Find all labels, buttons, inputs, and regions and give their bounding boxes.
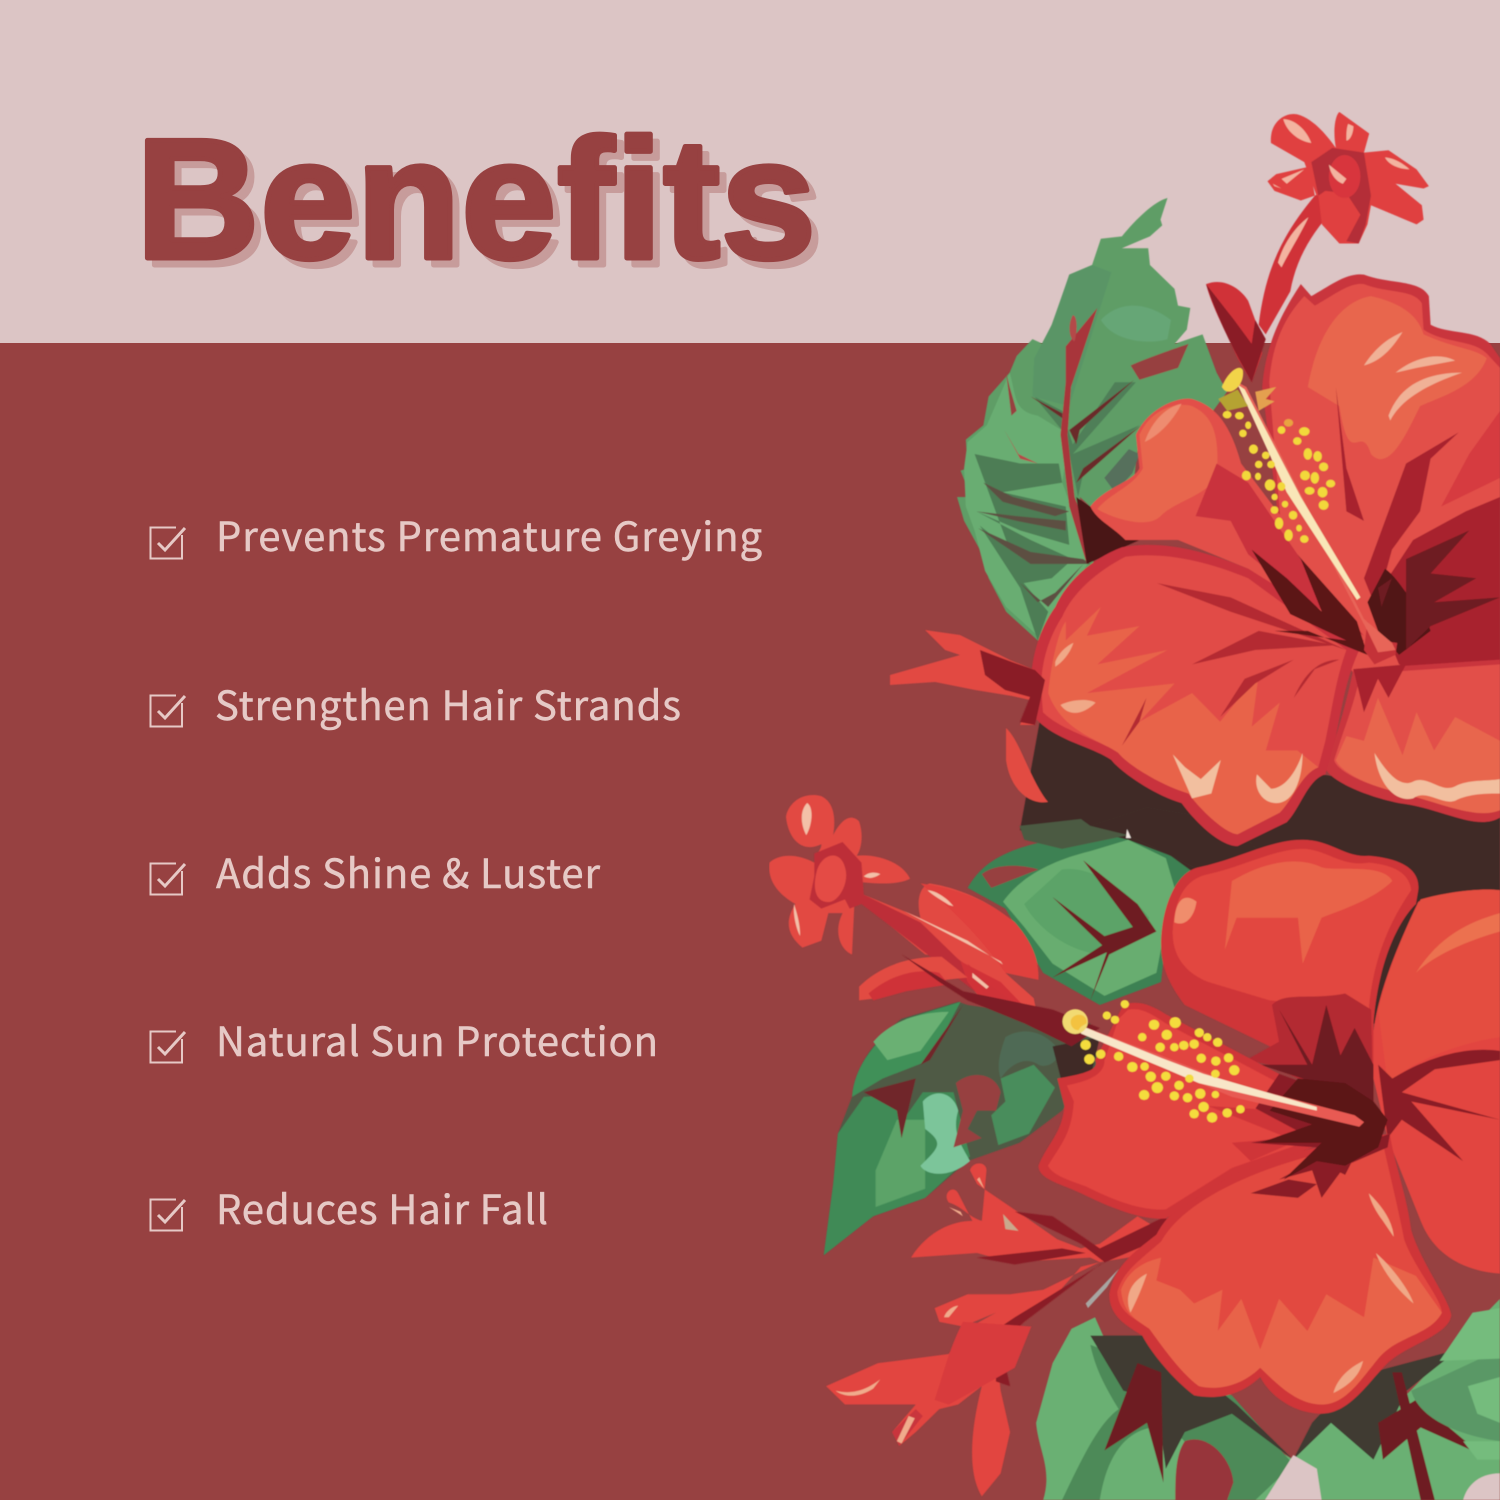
upper foliage and stem [957,112,1500,846]
hibiscus illustration [769,112,1500,1500]
flower centre [1260,1078,1388,1180]
petal: top [1161,840,1418,1120]
large lower-left petal [1031,545,1367,846]
petal: right [1372,890,1500,1274]
stamen dots [1080,1000,1245,1123]
bottom leaf cluster [1036,1299,1500,1500]
item: reduces hair fall: Reduces Hair Fall [216,1178,548,1236]
petal: bottom [1109,1134,1451,1414]
lower-left leaf [824,1002,1100,1255]
upper leaf [957,198,1227,640]
title: Benefits [136,104,816,295]
stamen dots [1223,411,1335,543]
upper bud with stem [769,795,1100,1046]
pistil [1218,368,1397,664]
petal: left [1038,1003,1373,1219]
middle leaf [968,808,1260,1005]
benefits list [150,505,762,1236]
lower right petal [1325,660,1500,822]
dark foliage backdrop [1020,720,1500,1060]
item: prevents premature greying: Prevents Premature Greying [216,505,762,563]
top petal [1262,274,1500,703]
lower flower [1038,840,1500,1414]
lower foliage [769,795,1500,1500]
item: adds shine and luster: Adds Shine & Luster [216,842,600,900]
lower-left bud stalk [826,1163,1175,1496]
stem bud [1206,112,1429,382]
left bud on upper flower [890,630,1131,838]
item: strengthen hair strands: Strengthen Hair Strands [215,674,681,732]
left upper petal [1090,399,1364,636]
pistil [1062,1009,1364,1127]
item: natural sun protection: Natural Sun Protection [216,1010,658,1068]
title: Benefits [143,111,823,302]
